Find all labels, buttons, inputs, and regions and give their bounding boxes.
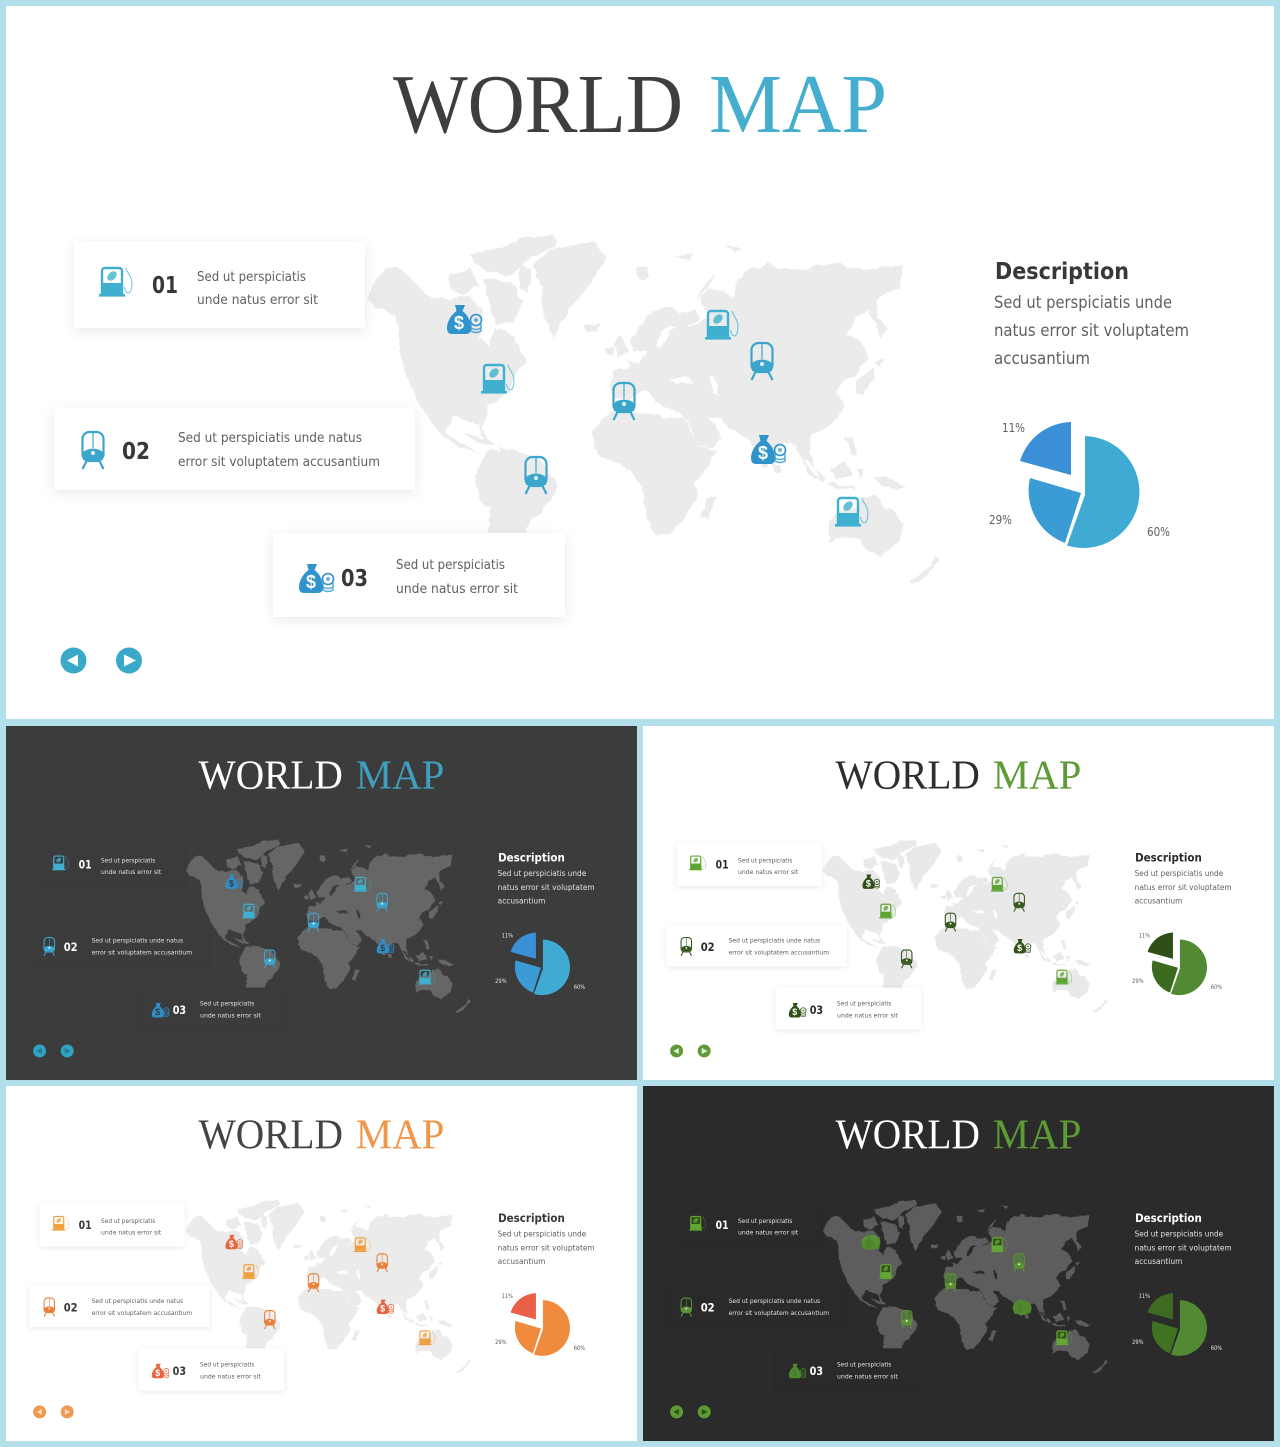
card 03	[273, 533, 565, 617]
pie chart: 11%	[502, 933, 513, 940]
card 01: unde natus error sit	[197, 293, 318, 308]
description: Sed ut perspiciatis unde	[498, 868, 586, 878]
pie chart: 60%	[1211, 1345, 1222, 1352]
pie chart	[1132, 1293, 1222, 1356]
card 02: error sit voluptatem accusantium	[92, 1309, 192, 1317]
description: natus error sit voluptatem	[498, 882, 595, 892]
card 03: Sed ut perspiciatis	[837, 1360, 892, 1368]
title	[393, 58, 887, 151]
description: accusantium	[498, 896, 545, 906]
description: natus error sit voluptatem	[994, 321, 1189, 340]
card 01	[677, 1203, 822, 1246]
pie chart: 60%	[1211, 984, 1223, 991]
panel: dark green slide	[643, 1086, 1274, 1441]
card 01: 01	[152, 273, 178, 299]
pie chart: 60%	[574, 984, 586, 991]
pie chart: 29%	[1132, 1339, 1144, 1346]
card 02: 02	[122, 439, 150, 465]
pie chart: 11%	[502, 1293, 513, 1300]
card 03: Sed ut perspiciatis	[396, 558, 505, 573]
card 03: 03	[173, 1364, 186, 1378]
card 02: Sed ut perspiciatis unde natus	[92, 936, 184, 944]
description: accusantium	[994, 349, 1090, 368]
card 01: unde natus error sit	[738, 868, 799, 876]
card 03: Sed ut perspiciatis	[837, 1000, 892, 1008]
card 01: unde natus error sit	[101, 868, 162, 876]
card 01: 01	[79, 1218, 92, 1232]
card 03: 03	[341, 566, 368, 592]
card 02	[667, 925, 847, 966]
description: natus error sit voluptatem	[498, 1242, 595, 1252]
pie chart	[1132, 933, 1223, 995]
card 02: Sed ut perspiciatis unde natus	[178, 431, 362, 446]
card 01: 01	[79, 858, 92, 871]
card 03	[139, 1348, 284, 1390]
pie chart	[495, 1293, 585, 1356]
navigation arrows	[33, 1045, 74, 1057]
description: accusantium	[1135, 896, 1182, 906]
card 03: unde natus error sit	[837, 1011, 898, 1019]
description: Sed ut perspiciatis unde	[498, 1228, 586, 1238]
card 01	[74, 241, 365, 328]
card 03: unde natus error sit	[200, 1011, 261, 1019]
pie chart	[989, 421, 1170, 548]
pie chart: 60%	[574, 1345, 585, 1352]
description: Sed ut perspiciatis unde	[1135, 1228, 1223, 1238]
title: WORLD	[199, 753, 343, 799]
card 03: unde natus error sit	[396, 582, 518, 597]
map markers	[225, 874, 435, 984]
card 01: Sed ut perspiciatis	[101, 1217, 156, 1225]
panel: dark blue slide	[6, 726, 637, 1080]
card 01: unde natus error sit	[101, 1228, 162, 1236]
title: MAP	[709, 58, 887, 151]
card 02: 02	[64, 940, 78, 954]
pie chart	[495, 933, 586, 995]
map markers	[862, 874, 1072, 984]
panel: light green slide	[643, 726, 1274, 1080]
card 01: Sed ut perspiciatis	[197, 270, 306, 285]
card 02: error sit voluptatem accusantium	[92, 948, 192, 956]
navigation arrows	[670, 1405, 711, 1418]
card 02	[667, 1286, 847, 1327]
pie chart: 29%	[495, 978, 507, 985]
card 01	[677, 843, 822, 886]
card 01: unde natus error sit	[738, 1228, 799, 1236]
description	[1135, 851, 1232, 906]
description	[498, 1211, 595, 1266]
card 02: Sed ut perspiciatis unde natus	[92, 1297, 184, 1305]
card 03: unde natus error sit	[837, 1372, 898, 1380]
card 02	[30, 1286, 210, 1327]
title: MAP	[993, 1113, 1081, 1159]
card 02: Sed ut perspiciatis unde natus	[729, 1297, 821, 1305]
card 02: error sit voluptatem accusantium	[729, 948, 829, 956]
map markers	[447, 305, 868, 527]
card 03: Sed ut perspiciatis	[200, 1000, 255, 1008]
title: WORLD	[836, 753, 980, 799]
description: Sed ut perspiciatis unde	[994, 293, 1172, 312]
world map	[366, 235, 939, 585]
pie chart: 11%	[1139, 933, 1150, 940]
card 02: error sit voluptatem accusantium	[729, 1309, 829, 1317]
card 03: 03	[810, 1003, 823, 1017]
title: MAP	[356, 753, 444, 799]
card 03	[139, 988, 284, 1029]
pie chart: 11%	[1002, 421, 1025, 435]
card 03	[776, 988, 921, 1029]
description	[994, 259, 1189, 368]
card 03: Sed ut perspiciatis	[200, 1360, 255, 1368]
card 01: 01	[716, 1218, 729, 1232]
world map	[822, 840, 1107, 1013]
description: natus error sit voluptatem	[1135, 882, 1232, 892]
title	[199, 1113, 444, 1159]
card 01	[40, 1203, 185, 1246]
navigation arrows	[33, 1405, 74, 1418]
navigation arrows	[60, 648, 142, 674]
description: accusantium	[1135, 1256, 1182, 1266]
description: Description	[995, 259, 1129, 285]
description: natus error sit voluptatem	[1135, 1242, 1232, 1252]
title: WORLD	[393, 58, 683, 151]
pie chart: 29%	[1132, 978, 1144, 985]
card 01	[40, 843, 185, 886]
card 02: error sit voluptatem accusantium	[178, 455, 380, 470]
card 01: 01	[716, 858, 729, 871]
world map	[822, 1200, 1107, 1374]
card 03: 03	[173, 1003, 186, 1017]
card 02: 02	[701, 940, 715, 954]
world map	[185, 840, 470, 1013]
description: accusantium	[498, 1256, 545, 1266]
description: Description	[1135, 1211, 1202, 1225]
card 02: Sed ut perspiciatis unde natus	[729, 936, 821, 944]
card 03: 03	[810, 1364, 823, 1378]
map markers	[861, 1235, 1072, 1345]
pie chart: 60%	[1147, 525, 1170, 539]
card 01: Sed ut perspiciatis	[101, 857, 156, 865]
description: Description	[1135, 851, 1202, 865]
description	[498, 851, 595, 906]
pie chart: 29%	[495, 1339, 507, 1346]
card 02: 02	[64, 1301, 78, 1315]
panel: light orange slide	[6, 1086, 637, 1441]
card 02: 02	[701, 1301, 715, 1315]
pie chart: 11%	[1139, 1293, 1150, 1300]
title: MAP	[993, 753, 1081, 799]
title	[836, 753, 1081, 799]
card 03: unde natus error sit	[200, 1372, 261, 1380]
card 01: Sed ut perspiciatis	[738, 857, 793, 865]
title	[836, 1113, 1081, 1159]
description: Sed ut perspiciatis unde	[1135, 868, 1223, 878]
map markers	[225, 1235, 435, 1345]
title: WORLD	[199, 1113, 343, 1159]
card 03	[776, 1348, 921, 1390]
card 02	[30, 925, 210, 966]
title: MAP	[356, 1113, 444, 1159]
world map	[185, 1200, 470, 1374]
title	[199, 753, 444, 799]
description	[1135, 1211, 1232, 1266]
navigation arrows	[670, 1045, 711, 1057]
card 01: Sed ut perspiciatis	[738, 1217, 793, 1225]
title: WORLD	[836, 1113, 980, 1159]
description: Description	[498, 1211, 565, 1225]
panel: main blue world map slide	[6, 6, 1274, 719]
description: Description	[498, 851, 565, 865]
pie chart: 29%	[989, 513, 1012, 527]
card 02	[54, 407, 415, 490]
